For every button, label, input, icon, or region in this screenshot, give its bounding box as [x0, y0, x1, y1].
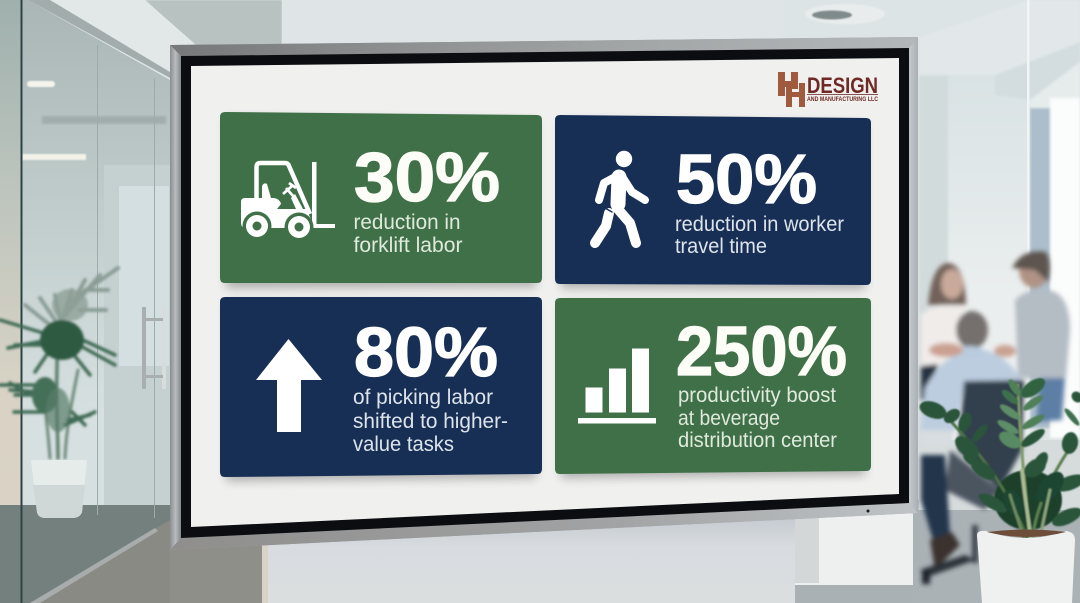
label: reduction in forklift labor [354, 211, 462, 257]
label: reduction in worker travel time [675, 213, 844, 258]
person: man seated [920, 311, 1024, 584]
label: picking labor shifted to higher-value tasks [353, 386, 508, 456]
display monitor [170, 37, 918, 550]
door handle [142, 307, 166, 389]
silver frame [170, 37, 918, 550]
card: 30% forklift labor [220, 112, 542, 288]
plant behind glass [0, 268, 118, 458]
pedestal and floor [170, 500, 1080, 603]
blurred people in meeting [920, 251, 1070, 584]
black bezel [181, 48, 909, 538]
stat: 30%: 30% [354, 138, 500, 216]
logo mark: H H blocks [778, 72, 805, 107]
label: reduction in worker travel time: travel time [675, 235, 767, 258]
icon: bar chart [578, 348, 656, 424]
label: reduction in worker travel time: reduction in worker [675, 213, 844, 236]
label: reduction in forklift labor: reduction in [354, 211, 460, 234]
left glass wall [0, 0, 195, 603]
label: productivity boost at beverage distribution center: distribution center [678, 429, 837, 452]
plant leaves [917, 374, 1080, 540]
stat: 250%: 250% [676, 312, 847, 390]
icon: forklift [241, 162, 335, 242]
logo wordmark: DESIGN [807, 73, 878, 98]
label: productivity boost at beverage distribution center: at beverage [678, 407, 780, 430]
white pot [977, 531, 1075, 603]
foreground plant in white pot [917, 374, 1080, 603]
white screen [191, 58, 899, 527]
label: productivity boost at beverage distribution center [678, 384, 837, 452]
card: 250% productivity boost [555, 298, 871, 478]
label: reduction in forklift labor: forklift labor [354, 234, 462, 257]
camera dot [866, 510, 870, 512]
person: man standing [994, 251, 1070, 422]
label: picking labor shifted to higher-value tasks: shifted to higher- [353, 410, 508, 433]
icon: up arrow [256, 339, 322, 432]
right wall and window [913, 0, 1080, 603]
logo [778, 72, 879, 107]
card: 50% worker travel time [555, 115, 871, 289]
label: picking labor shifted to higher-value tasks: of picking labor [353, 386, 493, 409]
stat: 80%: 80% [354, 313, 498, 391]
logo tagline: AND MANUFACTURING LLC [807, 97, 879, 103]
icon: walking person [595, 151, 645, 243]
plant pot behind glass [31, 460, 87, 518]
label: picking labor shifted to higher-value tasks: value tasks [353, 433, 454, 456]
person: woman standing [921, 263, 966, 400]
label: productivity boost at beverage distribution center: productivity boost [678, 384, 836, 407]
card: 80% picking labor shifted [220, 297, 542, 481]
pot soil [987, 530, 1066, 537]
stat: 50%: 50% [676, 140, 817, 218]
